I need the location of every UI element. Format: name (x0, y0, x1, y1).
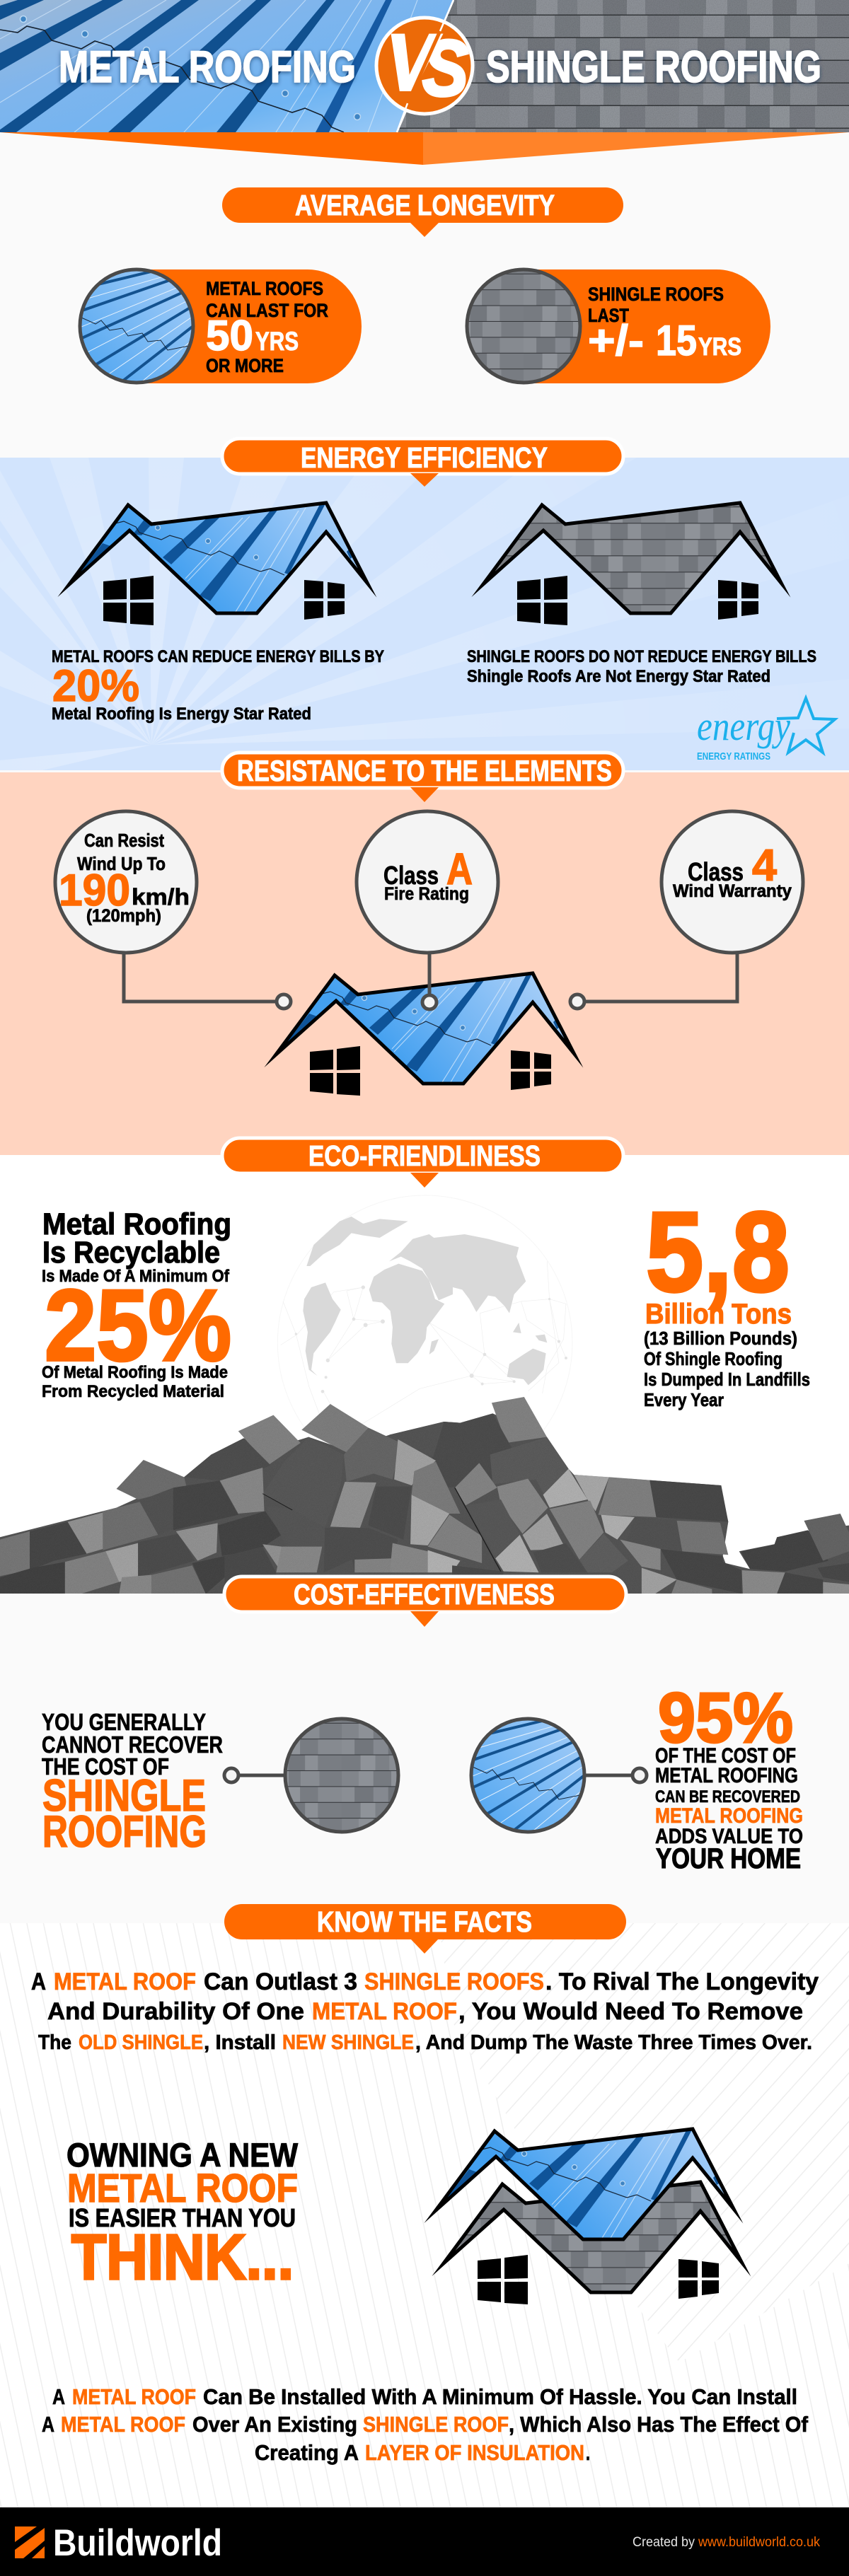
text: metal roofing is recyclable: 25% (45, 1270, 231, 1382)
text: installing over existing roof: A (42, 2412, 54, 2437)
text: metal roof outlasts shingle: OLD SHINGLE (79, 2031, 203, 2054)
credit line (633, 2535, 820, 2550)
text: metal roof savings: Metal Roofing Is Energy Star Rated (52, 704, 311, 724)
panel: know the facts (0, 1904, 849, 2507)
text: cannot recover shingle cost (42, 1709, 223, 1857)
heading: resistance to the elements (222, 753, 623, 802)
text: shingle roof no savings: Shingle Roofs Are Not Energy Star Rated (467, 667, 770, 686)
text: metal roof outlasts shingle: METAL ROOF (54, 1968, 196, 1995)
callout: class 4 wind warranty: Wind Warranty (673, 881, 792, 901)
text: shingle landfill waste: Billion Tons (645, 1299, 792, 1330)
capsule: shingle roofs 15 years: SHINGLE ROOFS (588, 284, 724, 305)
globe illustration (277, 1195, 572, 1490)
house: metal roof (50, 495, 382, 625)
text: metal roof outlasts shingle: METAL ROOF (312, 1998, 457, 2025)
callout: wind resistance 190 km/h (55, 811, 197, 953)
text: metal roof outlasts shingle: Can Outlast 3 (204, 1968, 357, 1995)
text: shingle landfill waste: (13 Billion Pounds) (644, 1328, 797, 1349)
callout: wind resistance 190 km/h: Can Resist (84, 830, 164, 851)
icon: metal disc (457, 1708, 607, 1846)
callout: wind resistance 190 km/h: 190 (59, 866, 130, 915)
text: cannot recover shingle cost: ROOFING (42, 1807, 207, 1857)
text: metal roof outlasts shingle: . To Rival The Longevity (545, 1968, 819, 1995)
panel: resistance to the elements (0, 753, 849, 1155)
connector: fire rating (422, 953, 437, 1009)
title: metal roofing: METAL ROOFING (59, 42, 356, 92)
text: metal roof savings (52, 647, 384, 724)
text: 95% recovered: YOUR HOME (656, 1843, 801, 1874)
capsule: shingle roofs 15 years: 15 (656, 317, 697, 364)
text: metal roofing is recyclable: Is Recyclable (42, 1236, 220, 1270)
callout: class A fire rating: Class (383, 861, 439, 890)
text: owning a new metal roof: THINK... (71, 2222, 294, 2293)
callout: class 4 wind warranty: 4 (752, 841, 777, 890)
text: shingle landfill waste: Every Year (644, 1389, 724, 1410)
credit line: www.buildworld.co.uk (698, 2535, 820, 2550)
metal roof photo (0, 0, 456, 132)
text: owning a new metal roof (67, 2136, 299, 2293)
capsule: shingle roofs 15 years (467, 269, 770, 383)
text: 95% recovered: METAL ROOFING (655, 1804, 803, 1828)
text: metal roofing is recyclable (42, 1207, 231, 1401)
connector: shingle disc (224, 1768, 286, 1782)
text: metal roof outlasts shingle: , Install (204, 2031, 276, 2054)
callout: class A fire rating: Fire Rating (384, 884, 469, 904)
text: installing over existing roof: SHINGLE ROOF (363, 2412, 509, 2437)
connector: metal disc (584, 1768, 647, 1782)
text: metal roofing is recyclable: Metal Roofing (42, 1207, 231, 1241)
text: metal roof savings: METAL ROOFS CAN REDUCE ENERGY BILLS BY (52, 647, 384, 666)
credit line: Created by (633, 2535, 695, 2550)
discarded shingle pile (0, 1397, 849, 1594)
text: owning a new metal roof: OWNING A NEW (67, 2136, 299, 2174)
vs badge: V (386, 18, 441, 107)
callout: class A fire rating (357, 811, 498, 953)
callout: wind resistance 190 km/h: km/h (132, 884, 190, 910)
heading: cost-effectiveness (224, 1577, 626, 1627)
heading: know the facts: KNOW THE FACTS (317, 1905, 532, 1938)
callout: class 4 wind warranty (662, 811, 803, 953)
text: installing over existing roof: METAL ROOF (72, 2384, 196, 2409)
text: 95% recovered (655, 1678, 803, 1874)
text: installing over existing roof: Can Be Installed With A Minimum Of Hassle. You Can Install (203, 2384, 797, 2409)
icon: shingle disc (285, 1719, 398, 1832)
heading: cost-effectiveness: COST-EFFECTIVENESS (294, 1578, 555, 1611)
text: 95% recovered: METAL ROOFING (655, 1764, 798, 1787)
header banner (0, 0, 849, 165)
vs badge: S (422, 24, 468, 112)
capsule: metal roofs 50 years: CAN LAST FOR (206, 300, 328, 321)
callout: wind resistance 190 km/h: (120mph) (86, 906, 161, 926)
text: metal roof outlasts shingle: SHINGLE ROOFS (364, 1968, 544, 1995)
logo wordmark: Buildworld (53, 2522, 222, 2564)
capsule: metal roofs 50 years: 50 (206, 312, 253, 359)
text: owning a new metal roof: METAL ROOF (67, 2166, 298, 2211)
capsule: metal roofs 50 years: OR MORE (206, 355, 284, 376)
text: 95% recovered: ADDS VALUE TO (655, 1825, 803, 1848)
heading: eco-friendliness (222, 1138, 623, 1188)
vs badge (376, 0, 473, 132)
text: 95% recovered: CAN BE RECOVERED (655, 1787, 800, 1806)
text: metal roof outlasts shingle: A (31, 1968, 46, 1995)
capsule: shingle roofs 15 years: LAST (588, 305, 629, 326)
text: installing over existing roof: A (52, 2384, 65, 2409)
text: shingle landfill waste: 5,8 (646, 1188, 790, 1315)
text: metal roof outlasts shingle: , You Would Need To Remove (458, 1998, 803, 2025)
text: metal roofing is recyclable: Of Metal Roofing Is Made (42, 1363, 228, 1382)
icon: energy ratings star logo (697, 698, 835, 762)
footer (0, 2507, 849, 2576)
icon: energy ratings star logo: energy (697, 703, 790, 749)
panel: average longevity (66, 187, 770, 397)
text: metal roofing is recyclable: From Recycled Material (42, 1382, 224, 1401)
text: shingle landfill waste: Is Dumped In Landfills (644, 1369, 810, 1390)
heading: average longevity: AVERAGE LONGEVITY (295, 189, 555, 221)
house: metal roof (256, 965, 589, 1096)
heading: resistance to the elements: RESISTANCE TO THE ELEMENTS (237, 754, 612, 787)
connector: wind warranty (570, 953, 737, 1009)
orange chevron (0, 132, 849, 165)
icon: buildworld logo mark (15, 2526, 45, 2558)
text: cannot recover shingle cost: SHINGLE (42, 1771, 206, 1821)
callout: class 4 wind warranty: Class (688, 857, 744, 886)
heading: energy efficiency: ENERGY EFFICIENCY (301, 441, 548, 474)
text: metal roof savings: 20% (52, 661, 139, 711)
text: metal roof outlasts shingle: , And Dump The Waste Three Times Over. (415, 2031, 812, 2054)
text: installing over existing roof (42, 2384, 809, 2465)
text: metal roofing is recyclable: Is Made Of A Minimum Of (42, 1267, 230, 1286)
text: shingle landfill waste: Of Shingle Roofing (644, 1348, 782, 1369)
capsule: shingle roofs 15 years: YRS (698, 333, 741, 361)
text: metal roof outlasts shingle: And Durability Of One (47, 1998, 304, 2025)
text: cannot recover shingle cost: THE COST OF (42, 1753, 169, 1780)
connector: wind resistance (124, 953, 291, 1009)
text: metal roof outlasts shingle: NEW SHINGLE (282, 2031, 414, 2054)
callout: wind resistance 190 km/h: Wind Up To (77, 853, 166, 874)
callout: class A fire rating: A (446, 845, 473, 894)
text: shingle landfill waste (644, 1188, 810, 1410)
house: metal roof over shingle roof (416, 2121, 749, 2304)
text: installing over existing roof: Creating A (255, 2440, 359, 2465)
panel: cost-effectiveness (0, 1577, 849, 1923)
text: metal roof outlasts shingle: The (38, 2031, 71, 2054)
text: 95% recovered: 95% (658, 1678, 793, 1758)
icon: energy ratings star logo: ENERGY RATINGS (697, 750, 770, 762)
text: shingle roof no savings (467, 647, 816, 686)
text: installing over existing roof: Over An Existing (192, 2412, 357, 2437)
shingle roof photo (393, 0, 849, 132)
text: metal roof outlasts shingle (31, 1968, 819, 2054)
text: 95% recovered: OF THE COST OF (655, 1744, 796, 1768)
text: cannot recover shingle cost: CANNOT RECOVER (42, 1731, 223, 1758)
text: installing over existing roof: . (586, 2440, 590, 2465)
house: shingle roof (483, 503, 781, 625)
heading: eco-friendliness: ECO-FRIENDLINESS (308, 1139, 541, 1172)
heading: average longevity (222, 187, 623, 237)
capsule: shingle roofs 15 years: +/- (588, 317, 644, 364)
heading: energy efficiency (222, 439, 623, 487)
panel: energy efficiency (0, 439, 849, 770)
capsule: metal roofs 50 years: YRS (255, 327, 299, 356)
text: installing over existing roof: , Which Also Has The Effect Of (509, 2412, 809, 2437)
capsule: metal roofs 50 years: METAL ROOFS (206, 278, 323, 299)
text: owning a new metal roof: IS EASIER THAN YOU (69, 2203, 296, 2232)
text: installing over existing roof: METAL ROOF (61, 2412, 185, 2437)
heading: know the facts (224, 1904, 626, 1954)
capsule: metal roofs 50 years (66, 259, 362, 397)
panel: eco-friendliness (0, 1138, 849, 1594)
text: cannot recover shingle cost: YOU GENERALLY (42, 1709, 206, 1735)
text: installing over existing roof: LAYER OF INSULATION (365, 2440, 584, 2465)
